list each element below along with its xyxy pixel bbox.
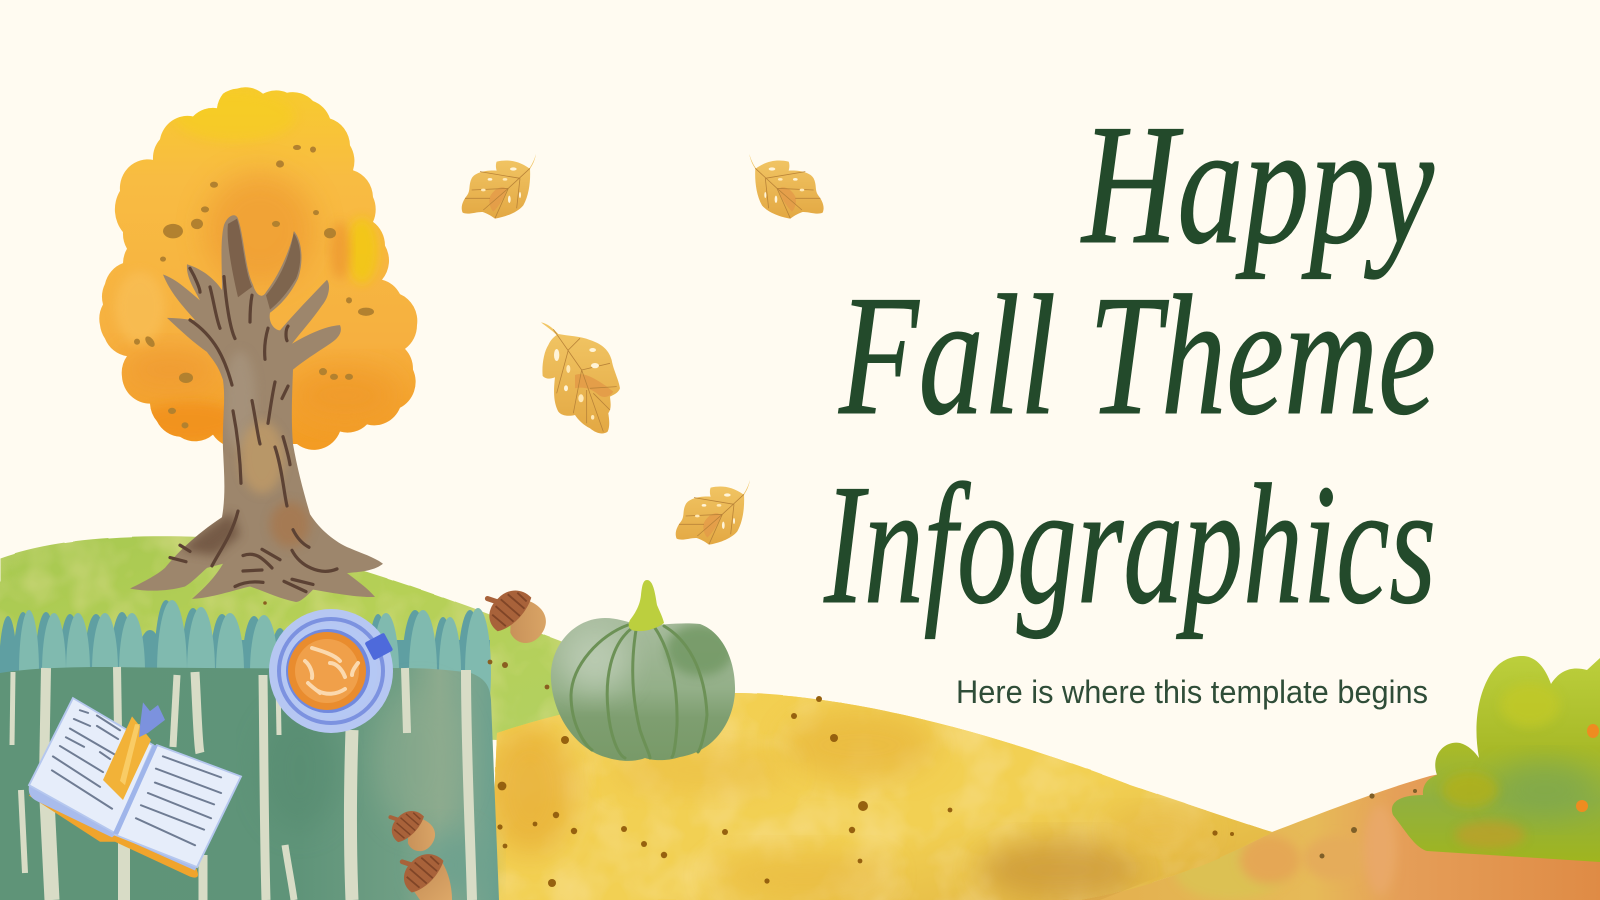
tree trunk xyxy=(130,215,383,602)
icon: acorn at blanket edge xyxy=(391,841,452,900)
icon: falling leaf bottom xyxy=(676,480,750,545)
illustration: open book xyxy=(29,698,241,878)
illustration: bush xyxy=(1392,656,1600,862)
illustration: yellow hill xyxy=(485,693,1272,900)
icon: falling leaf top left xyxy=(462,154,536,219)
title xyxy=(823,90,1436,640)
icon: falling leaf middle xyxy=(541,322,620,434)
tree crown xyxy=(99,87,417,450)
subtitle: Here is where this template begins xyxy=(956,674,1428,710)
title: Happy xyxy=(1080,90,1434,280)
icon: acorn on blanket xyxy=(381,800,442,860)
icon: falling leaf top right xyxy=(749,154,824,219)
icon: acorn on hill xyxy=(476,576,555,655)
icon: hill specks xyxy=(263,601,549,689)
illustration: tree xyxy=(99,87,417,602)
illustration: orange hill xyxy=(1081,774,1600,900)
illustration: blanket xyxy=(0,600,499,900)
illustration: coffee cup on saucer xyxy=(269,609,393,733)
icon: bookmark xyxy=(103,702,165,800)
blanket body xyxy=(0,667,499,900)
illustration: green hill xyxy=(0,536,570,740)
blanket fringe xyxy=(0,600,491,744)
illustration: pumpkin xyxy=(551,580,735,761)
